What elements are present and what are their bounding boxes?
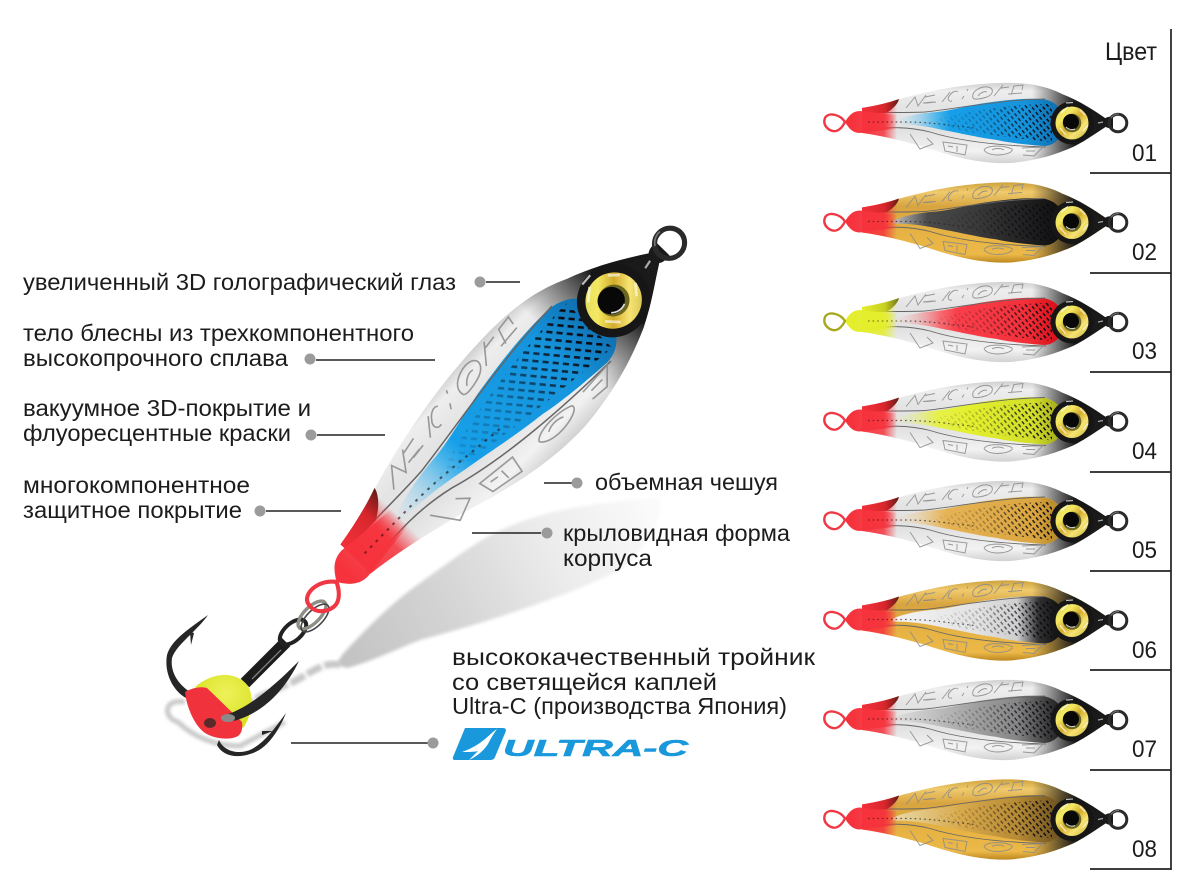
callout: eye: увеличенный 3D голографический глаз: [23, 269, 456, 295]
colour 08: gold, bronze: [824, 779, 1157, 863]
colour 02: gold, black: 02: [1132, 239, 1157, 266]
colour 03: silver, red, chartreuse tail: 03: [1132, 338, 1157, 365]
callout: treble hook: высококачественный тройник: [452, 644, 816, 670]
callout: treble hook: Ultra-C (производства Япония): [452, 693, 787, 719]
callout: coating and paints: вакуумное 3D-покрытие и: [23, 395, 311, 421]
shadow of the main lure: [168, 498, 661, 746]
logo: Ultra-C: ULTRA-C: [503, 735, 689, 761]
colour 05: silver, gold: [824, 481, 1157, 564]
logo: Ultra-C: [453, 728, 689, 761]
colour 06: gold, silver: [824, 580, 1157, 664]
callout: coating and paints: флуоресцентные краски: [23, 420, 291, 446]
callout: wing shape: корпуса: [563, 545, 652, 571]
main lure, blue: [264, 185, 728, 656]
callout: wing shape: крыловидная форма: [563, 520, 790, 546]
colour 01: silver, blue: 01: [1132, 140, 1157, 167]
callout: scales: объемная чешуя: [595, 469, 778, 495]
callout: protective coating: [23, 472, 341, 523]
callout: treble hook: [291, 644, 816, 748]
colour 05: silver, gold: 05: [1132, 537, 1157, 564]
callout: wing shape: [472, 520, 790, 571]
colour 01: silver, blue: [824, 83, 1157, 167]
colour 07: silver, grey: [824, 680, 1157, 763]
callout: coating and paints: [23, 395, 385, 446]
callout: body alloy: высокопрочного сплава: [23, 345, 288, 371]
hook shank: [245, 615, 311, 683]
colour 03: silver, red, chartreuse tail: [824, 282, 1157, 365]
colour 07: silver, grey: 07: [1132, 736, 1157, 763]
glowing bead: [185, 675, 251, 739]
colour 04: silver, chartreuse: 04: [1132, 438, 1157, 465]
callout: treble hook: со светящейся каплей: [452, 669, 717, 695]
treble hook with glowing drop: [166, 597, 333, 756]
hook: bottom prong: [217, 713, 286, 756]
colour 08: gold, bronze: 08: [1132, 836, 1157, 863]
colour 02: gold, black: [824, 182, 1157, 266]
callout: protective coating: многокомпонентное: [23, 472, 250, 498]
callout: body alloy: [23, 320, 435, 371]
callout: body alloy: тело блесны из трехкомпонентного: [23, 320, 414, 346]
callout: protective coating: защитное покрытие: [23, 497, 242, 523]
split ring: [294, 597, 333, 636]
table heading: Цвет: [1105, 38, 1157, 66]
colour 06: gold, silver: 06: [1132, 637, 1157, 664]
hook: left prong: [166, 615, 208, 698]
colour table frame: [1090, 29, 1171, 870]
hook: right prong: [221, 661, 299, 722]
colour 04: silver, chartreuse: [824, 381, 1157, 465]
